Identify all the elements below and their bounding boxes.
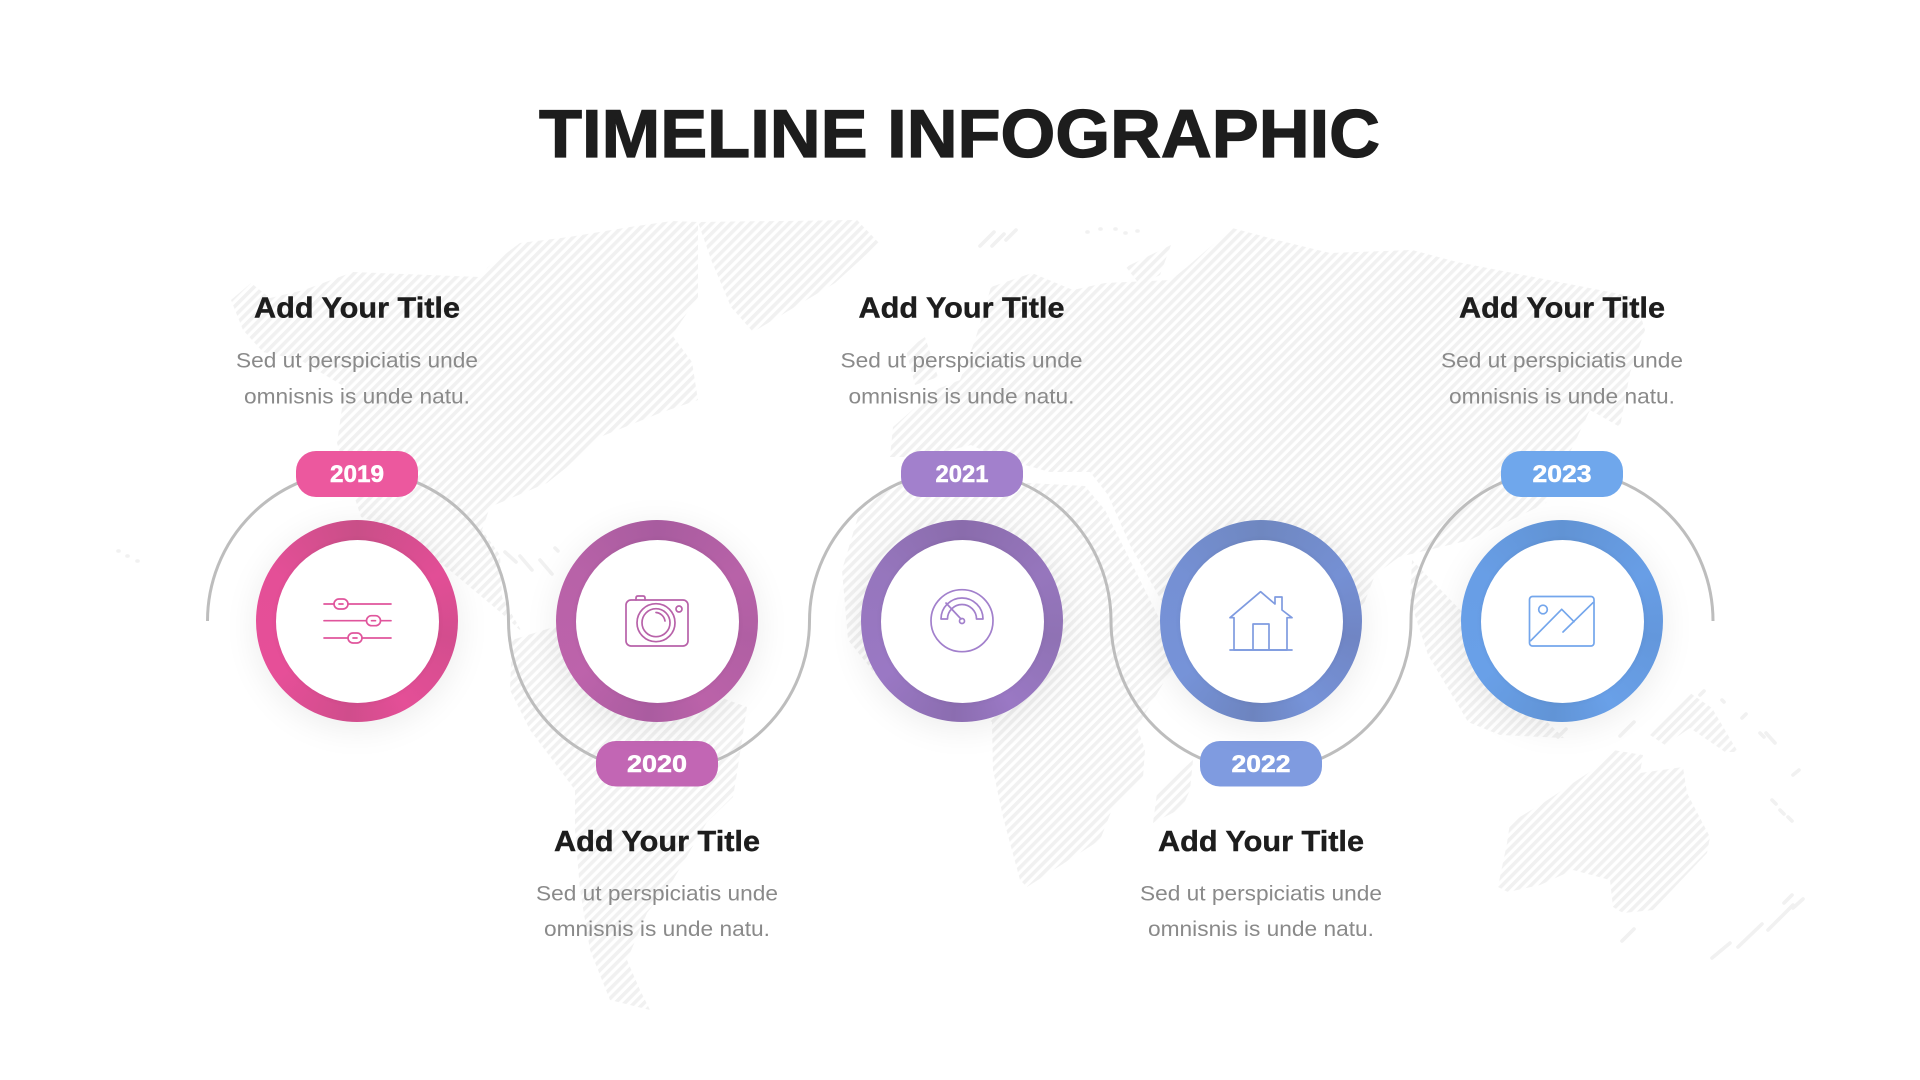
badge 2022: 2022 [1232, 751, 1290, 778]
text block 2019: Sed ut perspiciatis unde [236, 350, 478, 372]
ring 2020 with camera icon [556, 520, 758, 722]
badge 2019: 2019 [330, 461, 384, 488]
title: TIMELINE INFOGRAPHIC [539, 96, 1380, 172]
text block 2021: omnisnis is unde natu. [848, 386, 1074, 408]
ring 2021 with gauge icon [861, 520, 1063, 722]
badge 2021: 2021 [936, 461, 988, 488]
text block 2022: Add Your Title [1158, 826, 1364, 858]
text block 2019: omnisnis is unde natu. [244, 386, 470, 408]
text block 2022: Sed ut perspiciatis unde [1140, 882, 1382, 906]
icon: picture [1528, 596, 1595, 647]
badge 2020: 2020 [627, 751, 687, 778]
ring 2022 with house icon [1160, 520, 1362, 722]
text block 2021 [840, 292, 1082, 408]
icon: gauge [930, 588, 994, 652]
text block 2023: omnisnis is unde natu. [1449, 386, 1675, 408]
text block 2023 [1441, 292, 1683, 408]
icon: camera [625, 595, 689, 647]
ring 2023 with picture icon [1461, 520, 1663, 722]
text block 2023: Sed ut perspiciatis unde [1441, 350, 1683, 372]
text block 2022: omnisnis is unde natu. [1148, 918, 1374, 941]
text block 2022 [1140, 826, 1382, 941]
timeline curve [208, 470, 1713, 772]
text block 2020: omnisnis is unde natu. [544, 918, 770, 941]
text block 2021: Add Your Title [858, 292, 1064, 324]
badge 2019 [296, 451, 418, 497]
badge 2020 [596, 741, 718, 786]
icon: sliders [323, 598, 392, 644]
text block 2020: Sed ut perspiciatis unde [536, 882, 778, 906]
badge 2021 [901, 451, 1023, 497]
text block 2019 [236, 292, 478, 408]
badge 2022 [1200, 741, 1322, 786]
ring 2019 with sliders icon [256, 520, 458, 722]
text block 2020 [536, 826, 778, 941]
icon: house [1229, 590, 1293, 651]
badge 2023: 2023 [1532, 461, 1592, 488]
text block 2019: Add Your Title [254, 292, 460, 324]
badge 2023 [1501, 451, 1623, 497]
text block 2020: Add Your Title [554, 826, 760, 858]
text block 2021: Sed ut perspiciatis unde [840, 350, 1082, 372]
text block 2023: Add Your Title [1459, 292, 1665, 324]
